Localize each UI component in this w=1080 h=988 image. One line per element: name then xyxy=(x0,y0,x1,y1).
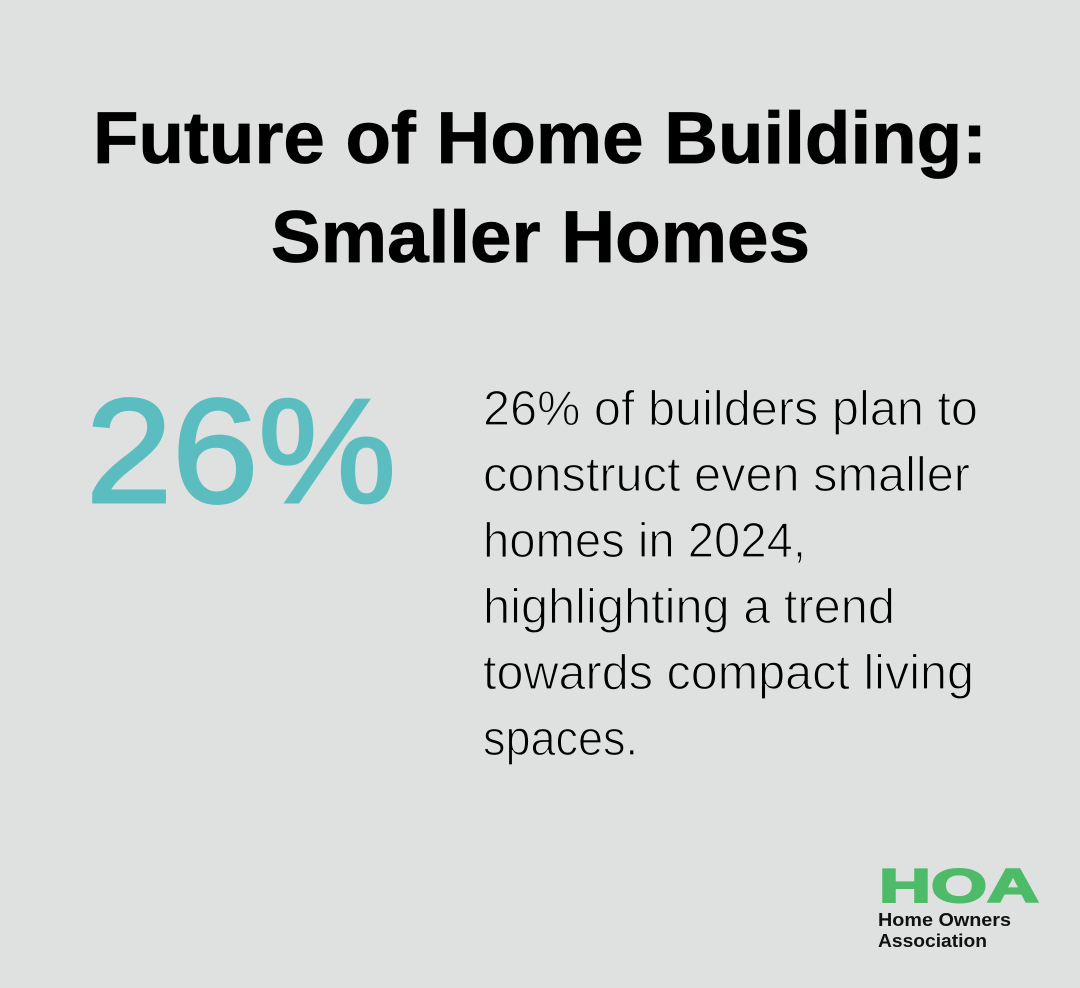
logo mark: HOA: HOA xyxy=(879,859,1039,912)
big statistic: 26%: 26% xyxy=(86,369,396,534)
description text: homes in 2024, xyxy=(483,514,806,568)
logo: HOA Home Owners Association xyxy=(878,859,1039,951)
logo text: Home Owners Association: Association xyxy=(878,931,987,951)
title: Smaller Homes xyxy=(271,197,810,278)
description text: construct even smaller xyxy=(483,448,970,502)
description text xyxy=(483,382,978,766)
title: Future of Home Building: xyxy=(93,98,987,179)
logo text: Home Owners Association: Home Owners xyxy=(878,910,1011,930)
description text: towards compact living xyxy=(483,646,974,700)
description text: highlighting a trend xyxy=(483,580,895,634)
logo text: Home Owners Association xyxy=(878,910,1011,951)
description text: 26% of builders plan to xyxy=(483,382,978,436)
description text: spaces. xyxy=(483,712,638,766)
title xyxy=(93,98,987,278)
